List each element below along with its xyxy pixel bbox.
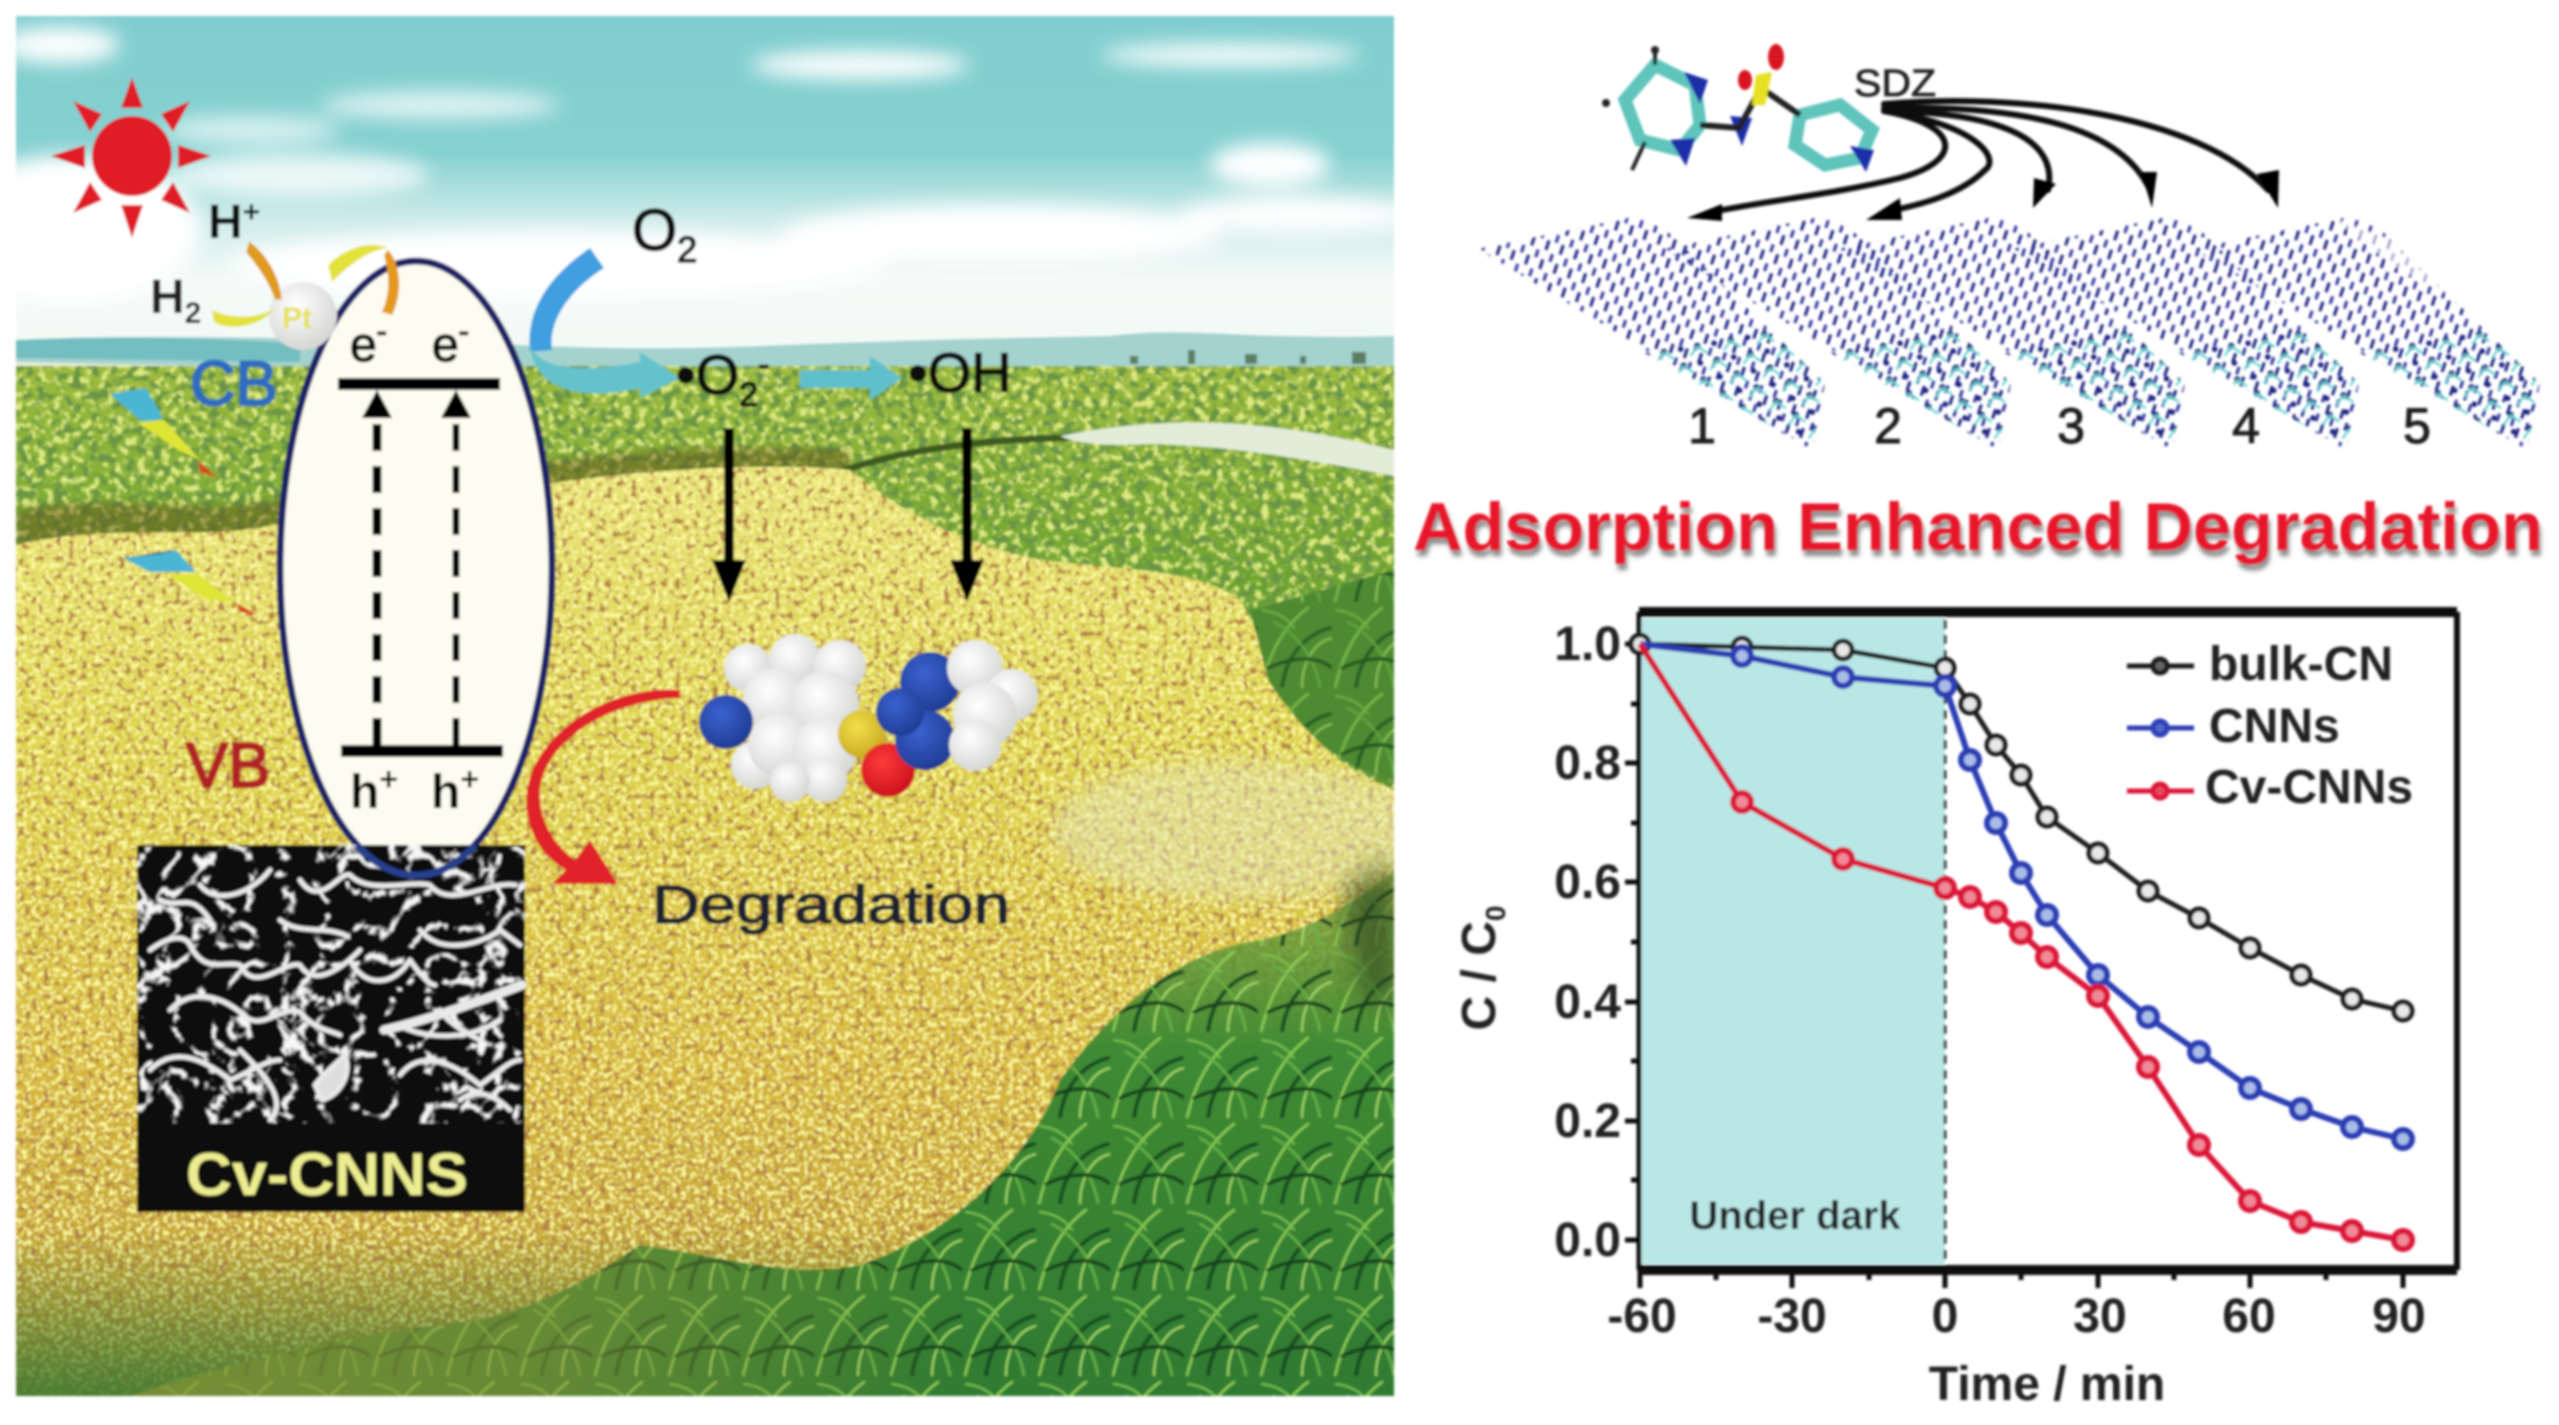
x axis labels: -30: [1757, 1290, 1827, 1343]
series: bulk-CN: [1631, 635, 2412, 1020]
label bar: Cv-CNNS: [137, 1123, 525, 1212]
river: [840, 422, 1394, 476]
dashed excitation arrow left: [362, 390, 392, 745]
legend: Cv-CNNs: [2205, 761, 2413, 814]
arrow: superoxide to hydroxyl: [800, 356, 902, 400]
y axis labels: 0.0: [1554, 1214, 1621, 1267]
legend: CNNs: [2209, 700, 2340, 753]
label: superoxide radical: •O: [676, 343, 739, 406]
valence band with holes: h: [431, 766, 460, 819]
layer numbers: 3: [2057, 398, 2085, 454]
panel: SDZ adsorption on layers: [1478, 44, 2540, 454]
layer numbers: 1: [1688, 398, 1716, 454]
label: Under dark: Under dark: [1689, 1194, 1901, 1238]
series: CNNs: [1640, 644, 2412, 1148]
series: Cv-CNNs: [1640, 644, 2412, 1249]
legend: bulk-CN: [2209, 638, 2393, 691]
arrow: hydroxyl attack: [950, 428, 984, 602]
green meadow: [16, 366, 1394, 826]
speckled yellow field: [16, 460, 1430, 1400]
y axis labels: 0.8: [1554, 737, 1621, 790]
conduction band with electrons: e: [350, 319, 377, 372]
y axis labels: 0.6: [1554, 856, 1621, 909]
heading: Adsorption Enhanced Degradation: Adsorption Enhanced Degradation: [1413, 489, 2543, 565]
icon: lightning bolt upper: [110, 388, 217, 478]
label: O2: 2: [677, 229, 697, 270]
dark/light boundary: [1944, 620, 1946, 1264]
x axis labels: 30: [2073, 1290, 2127, 1343]
Pt co-catalyst with H2 evolution: Pt: [282, 302, 312, 335]
x axis labels: 60: [2222, 1290, 2276, 1343]
valence band with holes: +: [379, 761, 398, 797]
label bar: Cv-CNNS: Cv-CNNS: [186, 1141, 468, 1208]
plot frame: [1625, 612, 2457, 1288]
y axis labels: [1554, 618, 1621, 1267]
label: VB: VB: [186, 731, 270, 801]
band ellipse bottom edge over micrograph: [357, 845, 475, 875]
grass patch right: [1250, 570, 1394, 1010]
oxygen reduction arrow: [529, 248, 680, 398]
label: superoxide radical: -: [758, 346, 769, 384]
Pt co-catalyst with H2 evolution: [150, 196, 399, 350]
legend: [2127, 638, 2413, 814]
layer numbers: 4: [2232, 398, 2260, 454]
arrow: superoxide attack: [712, 428, 746, 602]
conduction band with electrons: e: [432, 319, 459, 372]
label: O2: O: [632, 198, 677, 263]
layer numbers: 2: [1874, 398, 1902, 454]
label: H+: H: [208, 196, 243, 249]
valence band with holes: h: [350, 766, 379, 819]
panel: landscape photocatalysis scene: [0, 16, 1430, 1400]
icon: lightning bolt lower: [123, 550, 258, 615]
label: CB: CB: [190, 349, 278, 419]
conduction band with electrons: -: [459, 315, 469, 348]
x axis labels: [1607, 1290, 2426, 1343]
label: H2: H: [150, 271, 185, 324]
x axis labels: 90: [2372, 1290, 2426, 1343]
y axis title: C / C: [1453, 921, 1506, 1030]
SDZ ball-and-stick molecule: [1602, 44, 1874, 172]
x axis title: Time / min: [1929, 1358, 2165, 1411]
label: Degradation: Degradation: [652, 875, 1010, 935]
y axis labels: 0.2: [1554, 1095, 1621, 1148]
dashed excitation arrow right: [441, 390, 471, 745]
layer numbers: 5: [2403, 398, 2431, 454]
label: superoxide radical: 2: [739, 376, 758, 414]
stacked nanosheet layers: [1478, 216, 2540, 450]
SEM micrograph of Cv-CNNS: [137, 845, 525, 1212]
layer numbers: [1688, 398, 2431, 454]
x axis labels: -60: [1607, 1290, 1677, 1343]
valence band with holes: +: [460, 761, 479, 797]
conduction band with electrons: -: [377, 315, 387, 348]
under dark shaded region: [1641, 618, 1945, 1264]
y axis labels: 1.0: [1554, 618, 1621, 671]
label: SDZ: SDZ: [1854, 63, 1936, 105]
valence band with holes: [341, 745, 503, 819]
red curved degradation arrow: [526, 690, 680, 884]
band diagram ellipse: [280, 261, 552, 875]
label: hydroxyl radical: •OH: [908, 341, 1012, 404]
label: H+: +: [243, 196, 260, 229]
x axis labels: 0: [1932, 1290, 1958, 1343]
conduction band with electrons: [338, 315, 500, 390]
icon: red sun: [51, 77, 211, 238]
y axis title: 0: [1480, 906, 1511, 921]
grass clump foreground: [132, 870, 1396, 1398]
sky with clouds: [0, 16, 1420, 346]
space-filling SDZ molecule: [699, 634, 1038, 802]
chart: C/C0 vs time: [1453, 612, 2457, 1411]
label: H2: 2: [185, 297, 201, 330]
y axis labels: 0.4: [1554, 976, 1621, 1029]
distant mountains: [16, 332, 1394, 374]
adsorption arrows to layers: [1687, 101, 2279, 221]
